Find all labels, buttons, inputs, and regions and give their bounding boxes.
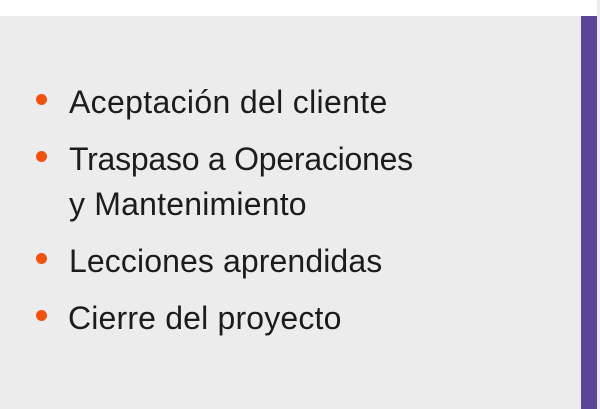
bullet: Cierre del proyecto: Cierre del proyecto bbox=[68, 300, 342, 336]
bullet: Lecciones aprendidas: Lecciones aprendidas bbox=[69, 243, 382, 279]
purple side bar bbox=[581, 16, 597, 409]
right edge strip bbox=[597, 0, 600, 409]
bullet: Traspaso a Operaciones y Mantenimiento: y Mantenimiento bbox=[69, 186, 307, 222]
bullet: Traspaso a Operaciones y Mantenimiento: Traspaso a Operaciones bbox=[69, 141, 413, 177]
bullet: Aceptación del cliente: Aceptación del cliente bbox=[69, 84, 388, 120]
bullet: Traspaso a Operaciones y Mantenimiento bbox=[36, 141, 413, 222]
